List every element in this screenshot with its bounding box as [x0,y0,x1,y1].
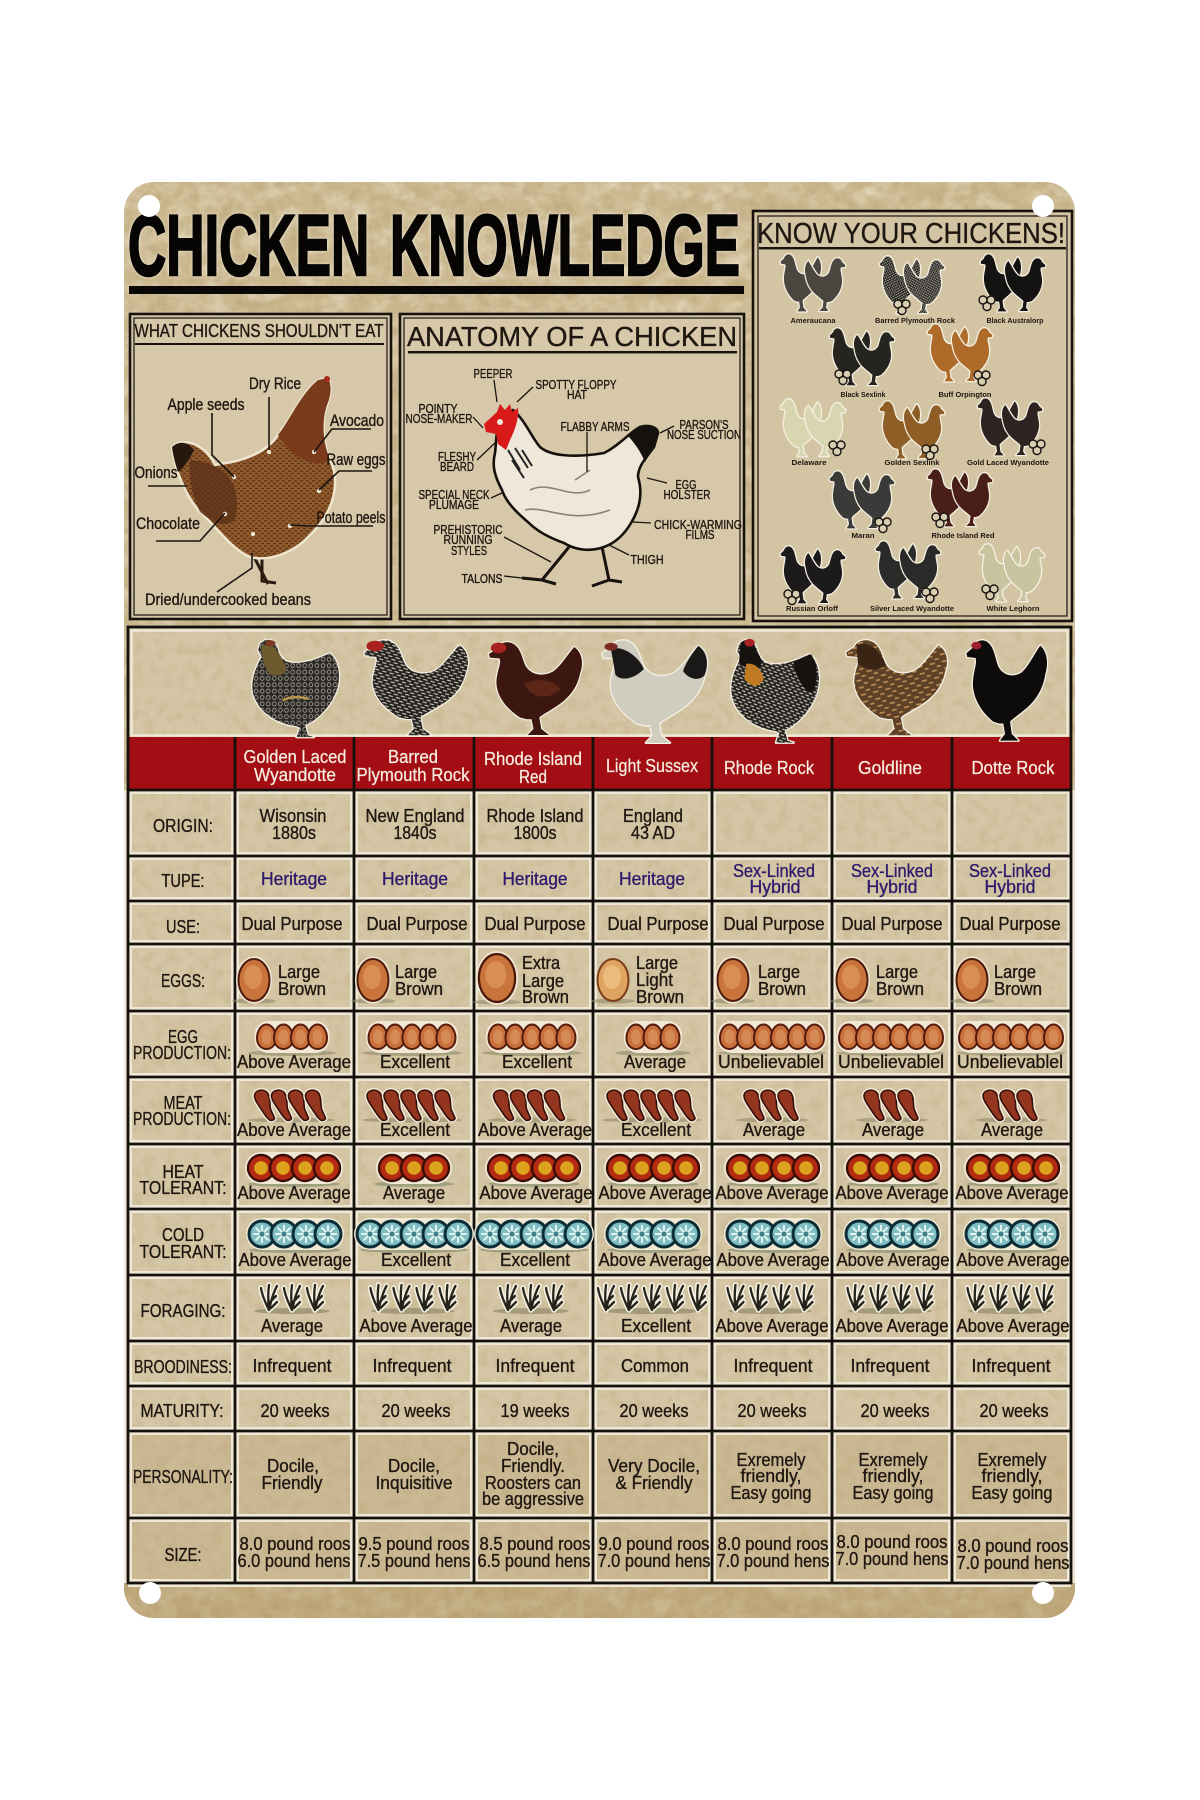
anatomy labels: STYLES [451,543,487,558]
row: origin: New England [366,805,464,826]
anatomy labels: PEEPER [474,366,512,381]
heading: what chickens shouldn't eat: WHAT CHICKENS SHOULDN'T EAT [134,321,384,341]
row: origin: Rhode Island [486,805,584,826]
chicken breed icons [781,254,1045,604]
row: size: 8.5 pound roos [480,1533,590,1554]
food labels: Potato peels [316,509,386,527]
row: personality: friendly, [740,1465,802,1486]
sign background [124,182,1075,1618]
row: cold tolerant text: Excellent [381,1249,451,1270]
breed name headers: Goldline [858,757,922,778]
row: origin: 43 AD [631,822,675,843]
row: origin [260,805,683,843]
row: personality: Exremely [736,1449,806,1470]
row: personality: Docile, [507,1438,559,1459]
row: broodiness: Infrequent [972,1355,1050,1376]
row: size: 8.0 pound roos [836,1531,948,1552]
row: use: Dual Purpose [366,913,468,934]
mounting holes [138,195,1054,1604]
food labels: Raw eggs [326,451,386,469]
row: eggs text: Large [636,952,678,973]
row: eggs text: Brown [636,986,684,1007]
row: meat production text [237,1119,1043,1140]
anatomy labels: SPECIAL NECK [418,487,490,502]
row: size: 8.0 pound roos [958,1535,1068,1556]
row: type: Hybrid [750,876,800,897]
row: cold tolerant text: Above Average [836,1249,950,1270]
row: eggs text: Brown [994,978,1042,999]
row: personality: friendly, [982,1465,1042,1486]
row: broodiness: Infrequent [496,1355,574,1376]
row: size: 7.5 pound hens [358,1550,470,1571]
breed name headers [244,746,1055,787]
row: eggs text: Brown [758,978,806,999]
row: foraging text [261,1315,1070,1336]
anatomy labels: CHICK-WARMING [654,517,742,532]
row: meat production text: Average [862,1119,924,1140]
row: heat tolerant text: Above Average [716,1182,828,1203]
row: meat production text: Above Average [478,1119,592,1140]
metal sign infographic [124,182,1075,1618]
row: type: Heritage [261,868,327,889]
row: origin: 1840s [394,822,436,843]
chicken breed names: Black Australorp [986,316,1044,325]
row: maturity [260,1400,1048,1421]
heading: anatomy of a chicken: ANATOMY OF A CHICKEN [407,321,737,352]
hen: rhode island red [489,642,582,735]
anatomy labels: RUNNING [444,532,492,547]
row labels: PRODUCTION: [133,1043,231,1063]
row: personality: friendly, [862,1465,924,1486]
row: cold tolerant text: Excellent [500,1249,570,1270]
food labels: Chocolate [136,515,200,533]
red header band [128,737,1071,790]
anatomy labels: THIGH [630,552,664,567]
food labels: Avocado [330,412,384,430]
panel: anatomy of a chicken [400,314,744,619]
row: type: Heritage [502,868,568,889]
row labels: PERSONALITY: [133,1467,233,1487]
row: use: Dual Purpose [842,913,942,934]
illustration: brown hen [172,376,335,584]
row: eggs text: Large [522,970,564,991]
row: size: 9.5 pound roos [358,1533,470,1554]
anatomy labels: PREHISTORIC [434,522,502,537]
row: size: 8.0 pound roos [240,1533,350,1554]
chicken breed names: Gold Laced Wyandotte [967,458,1049,467]
row labels: EGG [168,1027,198,1047]
row: broodiness [252,1355,1050,1376]
row: heat tolerant text: Above Average [836,1182,948,1203]
row labels: USE: [166,917,200,937]
row: eggs text: Large [876,961,918,982]
row: eggs text: Extra [522,952,561,973]
row: eggs icons [232,954,994,1004]
food labels: Dry Rice [249,375,301,393]
hen: goldline [846,640,947,735]
row: personality: Friendly [262,1472,323,1493]
row: size: 8.0 pound roos [718,1533,828,1554]
anatomy leader lines [473,380,674,578]
row: broodiness: Infrequent [252,1355,332,1376]
row: type [261,860,1051,897]
row: personality [262,1438,1052,1509]
row: type: Heritage [619,868,685,889]
heading: know your chickens: KNOW YOUR CHICKENS! [757,218,1065,250]
row: meat production text: Above Average [237,1119,351,1140]
food labels [134,375,386,609]
row: type: Heritage [382,868,448,889]
hen: barred plymouth rock [364,640,468,735]
row: eggs text: Brown [278,978,326,999]
row: meat production icons [247,1090,1047,1122]
row: cold tolerant text: Above Average [598,1249,712,1270]
anatomy labels: PARSON'S [680,417,729,432]
chicken breed names [786,316,1049,613]
breed name headers: Red [519,766,547,787]
row: cold tolerant text [238,1249,1070,1270]
row labels: MATURITY: [140,1401,224,1421]
anatomy labels: POINTY [418,401,458,416]
illustration: white hen [484,404,658,586]
row: personality: Easy going [730,1482,812,1503]
row: heat tolerant text: Above Average [238,1182,350,1203]
hen: rhode rock [731,639,819,743]
chicken breed names: White Leghorn [986,604,1040,613]
row: cold tolerant text: Above Average [238,1249,352,1270]
anatomy labels: BEARD [440,459,474,474]
row: egg production text: Unbelievablel [718,1051,824,1072]
row: maturity: 20 weeks [260,1400,330,1421]
row labels: SIZE: [164,1545,202,1565]
row labels: EGGS: [161,971,205,991]
breed name headers: Golden Laced [244,746,346,767]
row: personality: Roosters can [485,1472,581,1493]
breed name headers: Rhode Rock [724,757,815,778]
row: personality: be aggressive [482,1488,584,1509]
row: cold tolerant text: Above Average [956,1249,1070,1270]
anatomy labels: NOSE SUCTION [667,427,741,442]
row: use: Dual Purpose [724,913,824,934]
row: use: Dual Purpose [608,913,708,934]
anatomy labels: TALONS [462,571,503,586]
row: egg production text: Unbelievablel [838,1051,944,1072]
row: eggs text [278,952,1042,1007]
row: maturity: 20 weeks [382,1400,450,1421]
row: use [242,913,1060,934]
row: heat tolerant text: Above Average [598,1182,712,1203]
row: size: 7.0 pound hens [956,1552,1070,1573]
row: size: 9.0 pound roos [598,1533,710,1554]
row: foraging text: Above Average [716,1315,828,1336]
row: eggs text: Large [395,961,437,982]
chicken breed names: Buff Orpington [938,390,992,399]
chicken breed names: Silver Laced Wyandotte [870,604,954,613]
row: cold tolerant icons [246,1218,1061,1253]
row labels: ORIGIN: [153,816,213,836]
row: foraging text: Above Average [836,1315,948,1336]
row: broodiness: Infrequent [372,1355,452,1376]
chicken breed names: Rhode Island Red [932,531,995,540]
chicken breed names: Ameraucana [790,316,836,325]
food labels: Apple seeds [168,396,244,414]
row labels: TUPE: [162,871,204,891]
panel: breed comparison table [128,627,1071,1583]
row: heat tolerant text [238,1182,1068,1203]
row: egg production text: Average [624,1051,686,1072]
row: foraging text: Average [500,1315,562,1336]
table grid light lines [128,790,1071,1583]
row: meat production text: Average [981,1119,1043,1140]
row: eggs text: Brown [522,986,569,1007]
row: maturity: 20 weeks [620,1400,688,1421]
breed name headers: Rhode Island [484,748,582,769]
breed name headers: Light Sussex [606,755,699,776]
panel: know your chickens [753,211,1072,621]
row: use: Dual Purpose [484,913,586,934]
row labels: FORAGING: [140,1301,226,1321]
chicken breed names: Barred Plymouth Rock [875,316,956,325]
row: eggs text: Large [758,961,800,982]
row: personality: Easy going [852,1482,934,1503]
row: heat tolerant text: Above Average [956,1182,1068,1203]
row: foraging text: Above Average [956,1315,1070,1336]
row: heat tolerant text: Above Average [480,1182,592,1203]
hen: dotte rock [966,640,1047,741]
row: personality: Exremely [858,1449,928,1470]
food labels: Onions [134,464,178,482]
row: broodiness: Infrequent [850,1355,930,1376]
row: personality: Exremely [978,1449,1047,1470]
row: eggs text: Brown [876,978,924,999]
title [128,198,744,294]
title: CHICKEN KNOWLEDGE [128,198,740,294]
hen: golden laced wyandotte [252,640,339,737]
row: egg production text: Above Average [237,1051,351,1072]
row: size: 7.0 pound hens [716,1550,830,1571]
chicken breed names: Delaware [792,458,826,467]
row: type: Sex-Linked [969,860,1051,881]
row: maturity: 20 weeks [980,1400,1048,1421]
row labels: TOLERANT: [140,1178,226,1198]
row: size: 7.0 pound hens [598,1550,710,1571]
row: heat tolerant icons [245,1152,1062,1187]
row: maturity: 20 weeks [860,1400,930,1421]
row: egg production text [237,1051,1063,1072]
row: personality: Friendly. [501,1455,565,1476]
anatomy labels: FILMS [686,527,715,542]
row: size: 7.0 pound hens [836,1548,948,1569]
breed name headers: Dotte Rock [972,757,1055,778]
anatomy labels: HOLSTER [664,487,710,502]
row: personality: Easy going [972,1482,1052,1503]
chicken breed names: Maran [852,531,875,540]
row: egg production text: Unbelievablel [957,1051,1063,1072]
row: maturity: 19 weeks [500,1400,570,1421]
row labels: HEAT [162,1162,204,1182]
row: egg production text: Excellent [380,1051,450,1072]
row labels: BROODINESS: [134,1357,232,1377]
row: origin: 1880s [272,822,316,843]
row: egg production text: Excellent [502,1051,572,1072]
food labels: Dried/undercooked beans [145,591,311,609]
leader lines [148,397,373,592]
row labels: MEAT [164,1093,202,1113]
row: meat production text: Excellent [621,1119,691,1140]
breed illustrations [252,639,1047,743]
panel: what chickens shouldn't eat [130,314,391,619]
row: use: Dual Purpose [960,913,1060,934]
anatomy labels: FLESHY [438,449,476,464]
row: size [238,1531,1070,1573]
row: meat production text: Average [743,1119,805,1140]
breed name headers: Barred [388,746,438,767]
row: type: Hybrid [866,876,918,897]
row labels: COLD [162,1225,204,1245]
row: personality: Inquisitive [376,1472,452,1493]
row: personality: Docile, [267,1455,319,1476]
row: egg production icons [248,1021,1066,1056]
row: type: Hybrid [984,876,1036,897]
row: foraging text: Excellent [621,1315,691,1336]
chicken breed names: Russian Orloff [786,604,838,613]
anatomy labels: PLUMAGE [429,497,479,512]
table grid black lines [128,737,1071,1583]
row: personality: & Friendly [616,1472,693,1493]
row: foraging text: Above Average [360,1315,472,1336]
row: eggs text: Brown [395,978,443,999]
row: use: Dual Purpose [242,913,342,934]
anatomy labels: NOSE-MAKER [406,411,472,426]
anatomy labels: HAT [567,387,587,402]
row: size: 6.0 pound hens [238,1550,350,1571]
anatomy labels: FLABBY ARMS [560,419,630,434]
row: foraging icons [254,1285,1052,1314]
breed name headers: Wyandotte [254,764,336,785]
row: heat tolerant text: Average [383,1182,445,1203]
row: cold tolerant text: Above Average [716,1249,830,1270]
row: eggs text: Light [636,969,673,990]
row: personality: Docile, [388,1455,440,1476]
row: origin: Wisonsin [260,805,326,826]
row: broodiness: Common [621,1355,689,1376]
row: foraging text: Average [261,1315,323,1336]
row: origin: England [623,805,683,826]
hen: light sussex [602,640,707,743]
row labels: TOLERANT: [140,1242,226,1262]
row: origin: 1800s [514,822,556,843]
row: eggs text: Large [278,961,320,982]
row: meat production text: Excellent [380,1119,450,1140]
row labels [133,816,233,1565]
row: type: Sex-Linked [851,860,933,881]
anatomy labels [406,366,742,586]
chicken banner inner frame [132,630,1068,736]
anatomy labels: SPOTTY FLOPPY [536,377,617,392]
row: eggs text: Large [994,961,1036,982]
row: broodiness: Infrequent [734,1355,812,1376]
row labels: PRODUCTION: [133,1109,231,1129]
row: maturity: 20 weeks [738,1400,806,1421]
row: personality: Very Docile, [608,1455,700,1476]
chicken breed names: Golden Sexlink [884,458,940,467]
anatomy labels: EGG [676,477,696,492]
breed name headers: Plymouth Rock [356,764,470,785]
row: size: 6.5 pound hens [478,1550,590,1571]
row: type: Sex-Linked [733,860,815,881]
chicken breed names: Black Sexlink [840,390,886,399]
